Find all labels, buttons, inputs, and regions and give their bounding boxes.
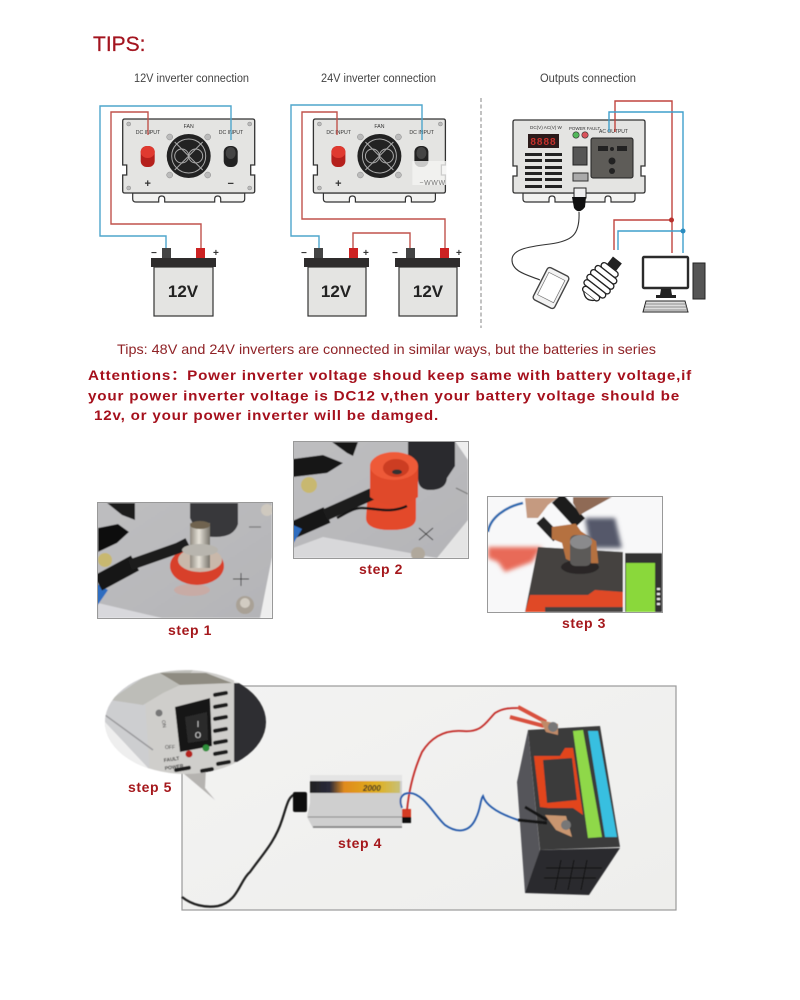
- inverter front panel: DC(V) AC(V) W: [530, 125, 563, 130]
- battery 12V: −: [151, 248, 157, 259]
- red wire 12V: [111, 112, 201, 248]
- attention warning: 12v, or your power inverter will be damged.: [94, 408, 439, 423]
- battery 12V left: [301, 248, 369, 316]
- battery 12V: 12V: [168, 282, 199, 301]
- power cord: [182, 794, 295, 907]
- blue output wire: [609, 112, 683, 253]
- icon: phone: [532, 267, 570, 309]
- inverter rear panel 12V: [123, 119, 255, 202]
- inverter rear panel 12V: −: [227, 178, 234, 190]
- USB plug and cable: [512, 188, 586, 280]
- tips note: Tips: 48V and 24V inverters are connected in similar ways, but the batteries in series: [117, 341, 656, 357]
- inverter rear panel 24V: [313, 119, 446, 202]
- callout: step 5 power switch magnifier: O: [195, 731, 201, 740]
- inverter front panel: [513, 120, 645, 202]
- inverter rear panel 24V: −WWW: [419, 180, 446, 187]
- blue wire 12V: [100, 106, 231, 248]
- title: TIPS:: [93, 33, 146, 56]
- inverter rear panel 24V: +: [335, 178, 342, 190]
- attention warning: [88, 368, 692, 423]
- photo: step 1 terminal post: [97, 502, 273, 618]
- blue wire 24V: [291, 105, 422, 248]
- label: step 2: step 2: [359, 561, 403, 577]
- red wire 24V: [302, 112, 445, 248]
- black clamp: [518, 807, 572, 837]
- panel: 24V inverter connection diagram: [291, 105, 462, 316]
- battery 12V right: 12V: [413, 282, 444, 301]
- battery 12V left: +: [363, 248, 369, 259]
- small inverter: 2000: [362, 784, 381, 793]
- red output wire: [614, 101, 672, 253]
- inverter front panel: AC OUTPUT: [599, 129, 628, 135]
- inverter rear panel 24V: FAN: [374, 124, 385, 130]
- callout: step 5 power switch magnifier: ON: [160, 720, 167, 729]
- blue cable: [400, 793, 518, 830]
- icon: light bulb: [576, 252, 628, 307]
- battery: [517, 726, 620, 895]
- callout: step 5 power switch magnifier: [105, 670, 266, 800]
- series link wire: [353, 233, 410, 248]
- heading: 24V inverter connection: 24V inverter connection: [321, 73, 436, 85]
- inverter front panel: POWER FAULT: [569, 126, 600, 131]
- label: step 1: step 1: [168, 622, 212, 638]
- label: step 5: step 5: [128, 779, 172, 795]
- callout: step 5 power switch magnifier: POWER: [164, 763, 184, 772]
- callout: step 5 power switch magnifier: OFF: [165, 745, 175, 751]
- heading: 12V inverter connection: 12V inverter connection: [134, 73, 249, 85]
- inverter rear panel 12V: DC INPUT: [136, 130, 161, 136]
- battery 12V: +: [213, 248, 219, 259]
- red clamp: [510, 707, 558, 735]
- heading: outputs connection: Outputs connection: [540, 73, 636, 85]
- inverter rear panel 12V: DC INPUT: [219, 130, 244, 136]
- attention warning: Attentions：Power inverter voltage shoud keep same with battery voltage,if: [88, 368, 692, 383]
- battery 12V right: −: [392, 248, 398, 259]
- red cable: [407, 708, 520, 810]
- attention warning: your power inverter voltage is DC12 v,then your battery voltage should be: [88, 388, 680, 404]
- panel: outputs connection diagram: [512, 101, 705, 312]
- small inverter: [307, 775, 402, 828]
- photo: step 3 battery clamp: [487, 496, 662, 612]
- photo: step 4 inverter connected to battery: [182, 686, 676, 910]
- battery 12V left: 12V: [321, 282, 352, 301]
- battery 12V right: +: [456, 248, 462, 259]
- callout: step 5 power switch magnifier: FAULT: [163, 756, 180, 764]
- battery 12V right: [392, 248, 462, 316]
- label: step 3: step 3: [562, 615, 606, 631]
- inverter front panel: 8888: [530, 137, 557, 148]
- inverter rear panel 12V: +: [144, 178, 151, 190]
- callout: step 5 power switch magnifier: I: [197, 720, 199, 729]
- panel: 12V inverter connection diagram: [100, 106, 255, 316]
- label: step 4: step 4: [338, 835, 382, 851]
- battery 12V left: −: [301, 248, 307, 259]
- inverter rear panel 12V: FAN: [184, 124, 194, 130]
- inverter rear panel 24V: DC INPUT: [409, 130, 435, 136]
- battery 12V: [151, 248, 219, 316]
- icon: computer: [643, 257, 705, 312]
- photo: step 2 red terminal cap: [293, 441, 468, 561]
- inverter rear panel 24V: DC INPUT: [326, 130, 352, 136]
